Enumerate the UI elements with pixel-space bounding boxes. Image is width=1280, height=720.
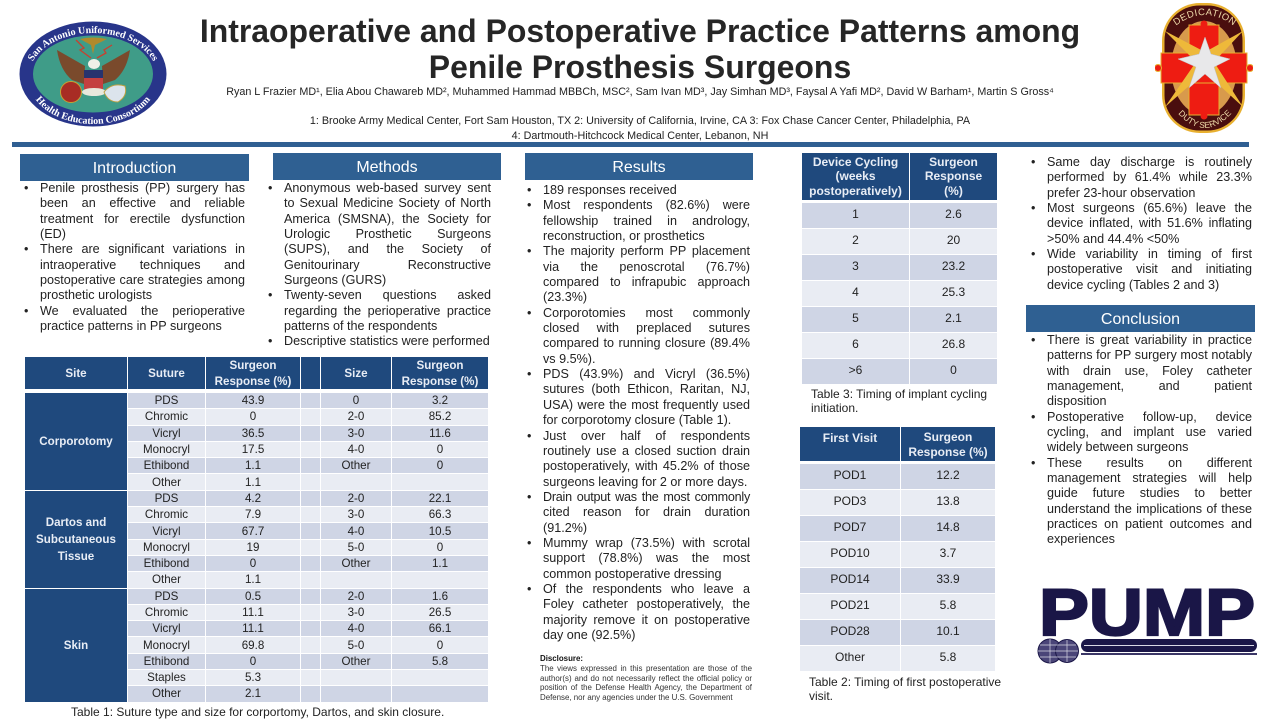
text block: introduction bullets: prosthetic urologists [40, 288, 152, 302]
text block: results bullets: USA) were the most frequently used [543, 398, 750, 412]
logo: Brooke Army Medical Center crest [1155, 3, 1253, 133]
table 1: suture type and size: 1.6 [432, 590, 448, 603]
table 1: suture type and size: 69.8 [242, 639, 264, 652]
text block: results bullets: compared to running closure (89.4% [543, 336, 750, 350]
text block: methods bullets: Anonymous web-based survey sent [284, 181, 491, 195]
table 3: device cycling timing: Device Cycling [813, 155, 898, 169]
text block: introduction bullets [24, 181, 245, 333]
text block: methods bullets: patterns of the respondents [284, 319, 437, 333]
table 2: first postoperative visit: 5.8 [940, 650, 956, 664]
text block: conclusion bullets: understand the implications of these [1047, 502, 1252, 516]
affiliations [310, 115, 970, 142]
text block: conclusion bullets: patterns for PP surgery most notably [1047, 348, 1252, 362]
table 2: first postoperative visit: 3.7 [940, 546, 956, 560]
table 1: suture type and size: Other [342, 459, 370, 472]
table 1: suture type and size: Skin [64, 639, 88, 652]
table 1: suture type and size: 4.2 [245, 492, 261, 505]
table 3: device cycling timing: (%) [944, 184, 963, 198]
table 3: device cycling timing: 4 [852, 285, 859, 299]
table 3: device cycling timing: 2.1 [945, 311, 962, 325]
caption: table 3 [811, 387, 987, 415]
table 1: suture type and size: 0 [250, 655, 256, 668]
table 1: suture type and size: 0 [437, 443, 443, 456]
heading: conclusion: Conclusion [1101, 311, 1180, 328]
table 2: first postoperative visit: 14.8 [936, 520, 960, 534]
logo: San Antonio Uniformed Services Health Education Consortium seal [20, 22, 166, 126]
table 1: suture type and size: 10.5 [429, 525, 451, 538]
text block: results bullets: closed with preplaced sutures [543, 321, 750, 335]
table 1: suture type and size: 0 [250, 410, 256, 423]
text block: introduction bullets: postoperative care strategies among [40, 273, 245, 287]
text block: methods bullets: Descriptive statistics were performed [284, 334, 490, 348]
text block: conclusion bullets: management, and patient [1047, 379, 1252, 393]
title: Penile Prosthesis Surgeons [429, 49, 851, 85]
table 1: suture type and size: Suture [148, 367, 185, 380]
table 1: suture type and size: PDS [155, 492, 178, 505]
table 1: suture type and size: Chromic [145, 410, 188, 423]
text block: conclusion bullets: management strategies will help [1047, 471, 1252, 485]
logo: Brooke Army Medical Center crest: DUTY SERVICE [1178, 110, 1232, 128]
table 1: suture type and size: 2-0 [348, 492, 364, 505]
table 1: suture type and size: Subcutaneous [36, 533, 116, 546]
caption: table 3: Table 3: Timing of implant cycling [811, 387, 987, 401]
table 1: suture type and size: Other [342, 557, 370, 570]
text block: introduction bullets: There are significant variations in [40, 242, 245, 256]
table 1: suture type and size: 11.1 [242, 606, 264, 619]
text block: conclusion bullets: experiences [1047, 532, 1115, 546]
table 1: suture type and size: 85.2 [429, 410, 451, 423]
table 2: first postoperative visit: First Visit [823, 431, 877, 445]
table 3: device cycling timing [802, 153, 997, 384]
table 1: suture type and size: Other [152, 687, 181, 700]
table 1: suture type and size: 0 [437, 541, 443, 554]
table 1: suture type and size: 1.1 [245, 459, 261, 472]
table 3: device cycling timing: (weeks [835, 169, 876, 183]
text block: results bullets: Foley catheter postoperatively, the [543, 597, 750, 611]
table 2: first postoperative visit: POD1 [834, 468, 866, 482]
text block: results continued [1032, 155, 1252, 292]
table 1: suture type and size: 1.1 [245, 573, 261, 586]
table 1: suture type and size: Staples [147, 671, 186, 684]
table 1: suture type and size: Other [152, 476, 181, 489]
text block: disclosure: author(s) and do not necessarily reflect the official policy or [540, 674, 752, 683]
table 2: first postoperative visit: POD14 [830, 572, 870, 586]
table 1: suture type and size: Size [344, 367, 368, 380]
table 1: suture type and size: 3.2 [432, 394, 448, 407]
text block: results bullets: for corporotomy closure (Table 1). [543, 413, 731, 427]
table 2: first postoperative visit: POD21 [830, 598, 870, 612]
text block: results bullets: via the penoscrotal (76.7%) [543, 260, 750, 274]
text block: methods bullets: Genitourinary Reconstructive [284, 258, 491, 272]
text block: conclusion bullets: guide future studies to better [1047, 486, 1252, 500]
table 3: device cycling timing: >6 [849, 363, 862, 377]
header rule [12, 142, 1249, 147]
table 3: device cycling timing: 2.6 [945, 207, 962, 221]
text block: disclosure: The views expressed in this presentation are those of the [540, 664, 752, 673]
text block: results continued: performed by 61.4% while 23.3% [1047, 170, 1252, 184]
caption: table 2: Table 2: Timing of first postoperative [809, 675, 1001, 689]
text block: conclusion bullets: Postoperative follow-up, device [1047, 410, 1252, 424]
table 1: suture type and size: 67.7 [242, 525, 264, 538]
text block: introduction bullets: We evaluated the perioperative [40, 304, 245, 318]
table 1: suture type and size: 5-0 [348, 541, 364, 554]
text block: results bullets: Drain output was the most commonly [543, 490, 750, 504]
text block: results continued: Most surgeons (65.6%) leave the [1047, 201, 1252, 215]
table 1: suture type and size: 4-0 [348, 443, 364, 456]
table 1: suture type and size: 7.9 [245, 508, 261, 521]
table 1: suture type and size: Ethibond [144, 655, 189, 668]
table 1: suture type and size: Dartos and [46, 516, 106, 529]
text block: results bullets: postoperatively, with 45.2% of those [543, 459, 750, 473]
text block: results bullets: Of the respondents who leave a [543, 582, 750, 596]
table 1: suture type and size: Monocryl [143, 639, 190, 652]
table 2: first postoperative visit: Other [835, 650, 865, 664]
table 1: suture type and size: Vicryl [152, 622, 181, 635]
logo: San Antonio Uniformed Services Health Education Consortium seal: San Antonio Uniformed Services [28, 26, 157, 61]
panel: methods [268, 153, 501, 348]
text block: methods bullets: (SUPS), and the Society of [284, 242, 491, 256]
text block: results bullets: cited reason for drain duration [543, 505, 750, 519]
text block: results bullets: majority remove it on postoperative [543, 613, 750, 627]
table 1: suture type and size: PDS [155, 590, 178, 603]
table 1: suture type and size: Vicryl [152, 427, 181, 440]
panel: results [525, 153, 753, 642]
text block: introduction bullets: intraoperative techniques and [40, 258, 245, 272]
table 1: suture type and size: 1.1 [432, 557, 448, 570]
text block: results bullets: (91.2%) [543, 521, 587, 535]
text block: results continued: Same day discharge is routinely [1047, 155, 1252, 169]
table 1: suture type and size: Surgeon Response (%) [402, 359, 478, 388]
affiliations: 4: Dartmouth-Hitchcock Medical Center, Lebanon, NH [512, 130, 768, 142]
text block: results bullets: fellowship trained in andrology, [543, 214, 750, 228]
title [200, 13, 1080, 85]
table 1: suture type and size: Monocryl [143, 443, 190, 456]
text block: results bullets: Mummy wrap (73.5%) with scrotal [543, 536, 750, 550]
text block: conclusion bullets: disposition [1047, 394, 1107, 408]
author list: Ryan L Frazier MD¹, Elia Abou Chawareb MD², Muhammed Hammad MBBCh, MSC², Sam Ivan MD³, Jay Simhan MD³, Faysal A Yafi MD², David W Barham¹, Martin S Gross⁴ [226, 86, 1054, 98]
text block: introduction bullets: been an effective and reliable [40, 196, 245, 210]
text block: conclusion bullets: practices on patient outcomes and [1047, 517, 1252, 531]
text block: results bullets: The majority perform PP placement [543, 244, 750, 258]
table 1: suture type and size: 22.1 [429, 492, 451, 505]
text block: results bullets: 189 responses received [543, 183, 677, 197]
table 1: suture type and size: Ethibond [144, 459, 189, 472]
title: Intraoperative and Postoperative Practice Patterns among [200, 13, 1080, 49]
table 1: suture type and size: Other [152, 573, 181, 586]
text block: results bullets: (23.3%) [543, 290, 587, 304]
table 1: suture type and size: 3-0 [348, 427, 364, 440]
table 1: suture type and size: Vicryl [152, 525, 181, 538]
table 1: suture type and size: 0 [437, 459, 443, 472]
table 1: suture type and size: 43.9 [242, 394, 264, 407]
table 3: device cycling timing: 6 [852, 337, 859, 351]
table 2: first postoperative visit: POD3 [834, 494, 866, 508]
heading: methods [273, 153, 501, 180]
text block: results continued: postoperative visit and initiating [1047, 262, 1252, 276]
table 1: suture type and size: 66.1 [429, 622, 451, 635]
heading: results [525, 153, 753, 180]
text block: introduction bullets: practice patterns in PP surgeons [40, 319, 222, 333]
table 1: suture type and size: 0 [353, 394, 359, 407]
table 1: suture type and size: 4-0 [348, 622, 364, 635]
table 1: suture type and size: 26.5 [429, 606, 451, 619]
text block: conclusion bullets [1032, 333, 1252, 546]
panel: introduction [20, 154, 249, 333]
table 2: first postoperative visit: POD10 [830, 546, 870, 560]
table 1: suture type and size: 0 [437, 639, 443, 652]
table 3: device cycling timing: 5 [852, 311, 859, 325]
panel: conclusion [1026, 305, 1255, 546]
text block: introduction bullets: treatment for erectile dysfunction [40, 212, 245, 226]
text block: results continued: Wide variability in timing of first [1047, 247, 1252, 261]
table 1: suture type and size: Other [342, 655, 370, 668]
caption: table 2 [809, 675, 1001, 703]
heading: results: Results [612, 159, 666, 176]
table 1: suture type and size: 5-0 [348, 639, 364, 652]
table 1: suture type and size: Monocryl [143, 541, 190, 554]
text block: results continued: >50% and 44.4% <50% [1047, 232, 1179, 246]
text block: results bullets: support (78.8%) was the most [543, 551, 750, 565]
table 1: suture type and size: 17.5 [242, 443, 264, 456]
table 2: first postoperative visit: 10.1 [936, 624, 960, 638]
heading: methods: Methods [356, 159, 418, 176]
table 1: suture type and size: Ethibond [144, 557, 189, 570]
table 3: device cycling timing: 25.3 [942, 285, 965, 299]
table 1: suture type and size: Chromic [145, 508, 188, 521]
text block: results bullets: surgeons leaving for 2 or more days. [543, 475, 747, 489]
text block: results bullets: common postoperative dressing [543, 567, 722, 581]
logo: Brooke Army Medical Center crest: DEDICATION [1172, 8, 1236, 26]
text block: results continued: device cycling (Tables 2 and 3) [1047, 278, 1219, 292]
table 1: suture type and size: 5.3 [245, 671, 261, 684]
table 1: suture type and size: 19 [247, 541, 259, 554]
table 2: first postoperative visit [800, 427, 995, 671]
table 1: suture type and size: 11.6 [429, 427, 451, 440]
text block: results bullets: Corporotomies most commonly [543, 306, 750, 320]
text block: results bullets: Just over half of respondents [543, 428, 750, 442]
text block: results bullets: Most respondents (82.6%) were [543, 198, 750, 212]
table 1: suture type and size: PDS [155, 394, 178, 407]
table 3: device cycling timing: 0 [950, 363, 957, 377]
table 3: device cycling timing: 23.2 [942, 259, 965, 273]
table 2: first postoperative visit: Surgeon [924, 430, 972, 444]
table 1: suture type and size: 0.5 [245, 590, 261, 603]
text block: results bullets: reconstruction, or prosthetics [543, 229, 705, 243]
text block: conclusion bullets: with drain use, Foley catheter [1047, 364, 1252, 378]
text block: conclusion bullets: widely between surgeons [1047, 440, 1188, 454]
table 3: device cycling timing: Response [925, 169, 982, 183]
table 1: suture type and size: Site [65, 367, 87, 380]
text block: methods bullets [268, 181, 491, 348]
text block: results bullets: PDS (43.9%) and Vicryl (36.5%) [543, 367, 750, 381]
table 1: suture type and size: 3-0 [348, 508, 364, 521]
table 2: first postoperative visit: 12.2 [936, 468, 960, 482]
text block: results bullets: sutures (both Ethicon, Raritan, NJ, [543, 382, 750, 396]
table 1: suture type and size: 1.1 [245, 476, 261, 489]
table 1: suture type and size: 2.1 [245, 687, 261, 700]
heading: introduction [20, 154, 249, 181]
table 1: suture type and size [25, 357, 488, 702]
text block: results continued: prefer 23-hour observation [1047, 186, 1195, 200]
table 1: suture type and size: 4-0 [348, 525, 364, 538]
table 3: device cycling timing: 1 [852, 207, 859, 221]
affiliations: 1: Brooke Army Medical Center, Fort Sam Houston, TX 2: University of California, Irvine, CA 3: Fox Chase Cancer Center, Philadelphia, PA [310, 115, 970, 127]
table 2: first postoperative visit: POD28 [830, 624, 870, 638]
table 1: suture type and size: 66.3 [429, 508, 451, 521]
table 1: suture type and size: 0 [250, 557, 256, 570]
table 2: first postoperative visit: 5.8 [940, 598, 956, 612]
table 1: suture type and size: 36.5 [242, 427, 264, 440]
text block: disclosure [540, 654, 752, 702]
logo: San Antonio Uniformed Services Health Education Consortium seal: Health Education Consortium [36, 95, 150, 124]
heading: introduction: Introduction [93, 160, 176, 177]
text block: results continued: device inflated, with 51.6% inflating [1047, 216, 1252, 230]
table 3: device cycling timing: 2 [852, 233, 859, 247]
text block: results bullets: routinely use a closed suction drain [543, 444, 750, 458]
table 1: suture type and size: Corporotomy [39, 435, 113, 448]
text block: conclusion bullets: cycling, and implant use varied [1047, 425, 1252, 439]
text block: results bullets: day one (92.5%) [543, 628, 635, 642]
text block: methods bullets: Urologic Prosthetic Surgeons [284, 227, 491, 241]
text block: conclusion bullets: There is great variability in practice [1047, 333, 1252, 347]
table 1: suture type and size: 2-0 [348, 590, 364, 603]
table 2: first postoperative visit: Response (%) [908, 444, 988, 458]
caption: table 3: initiation. [811, 401, 858, 415]
table 3: device cycling timing: 26.8 [942, 337, 965, 351]
heading: conclusion [1026, 305, 1255, 332]
text block: disclosure: position of the Defense Health Agency, the Department of [540, 683, 752, 692]
table 1: suture type and size: Tissue [58, 550, 94, 563]
caption: table 2: visit. [809, 689, 833, 703]
text block: introduction bullets: (ED) [40, 227, 66, 241]
table 1: suture type and size: 11.1 [242, 622, 264, 635]
text block: results bullets [528, 183, 750, 642]
text block: introduction bullets: Penile prosthesis (PP) surgery has [40, 181, 245, 195]
text block: results bullets: compared to infrapubic approach [543, 275, 750, 289]
text block: conclusion bullets: These results on different [1047, 456, 1252, 470]
text block: results bullets: vs 9.5%). [543, 352, 596, 366]
text block: methods bullets: to Sexual Medicine Society of North [284, 196, 491, 210]
table 2: first postoperative visit: 13.8 [936, 494, 960, 508]
table 1: suture type and size: Surgeon Response (%) [215, 359, 291, 388]
table 3: device cycling timing: postoperatively) [809, 184, 902, 198]
text block: methods bullets: Surgeons (GURS) [284, 273, 386, 287]
table 1: suture type and size: Chromic [145, 606, 188, 619]
table 1: suture type and size: 3-0 [348, 606, 364, 619]
caption: table 1: Table 1: Suture type and size for corportomy, Dartos, and skin closure. [71, 705, 444, 719]
table 1: suture type and size: 5.8 [432, 655, 448, 668]
text block: methods bullets: Twenty-seven questions asked [284, 288, 491, 302]
table 3: device cycling timing: Surgeon [929, 155, 978, 169]
text block: disclosure: Disclosure: [540, 654, 583, 663]
table 3: device cycling timing: 3 [852, 259, 859, 273]
table 2: first postoperative visit: 33.9 [936, 572, 960, 586]
text block: disclosure: Defense, nor any agencies under the U.S. Government [540, 693, 733, 702]
table 3: device cycling timing: 20 [947, 233, 960, 247]
table 2: first postoperative visit: POD7 [834, 520, 866, 534]
text block: methods bullets: regarding the perioperative practice [284, 304, 491, 318]
text block: methods bullets: America (SMSNA), the Society for [284, 212, 491, 226]
table 1: suture type and size: 2-0 [348, 410, 364, 423]
